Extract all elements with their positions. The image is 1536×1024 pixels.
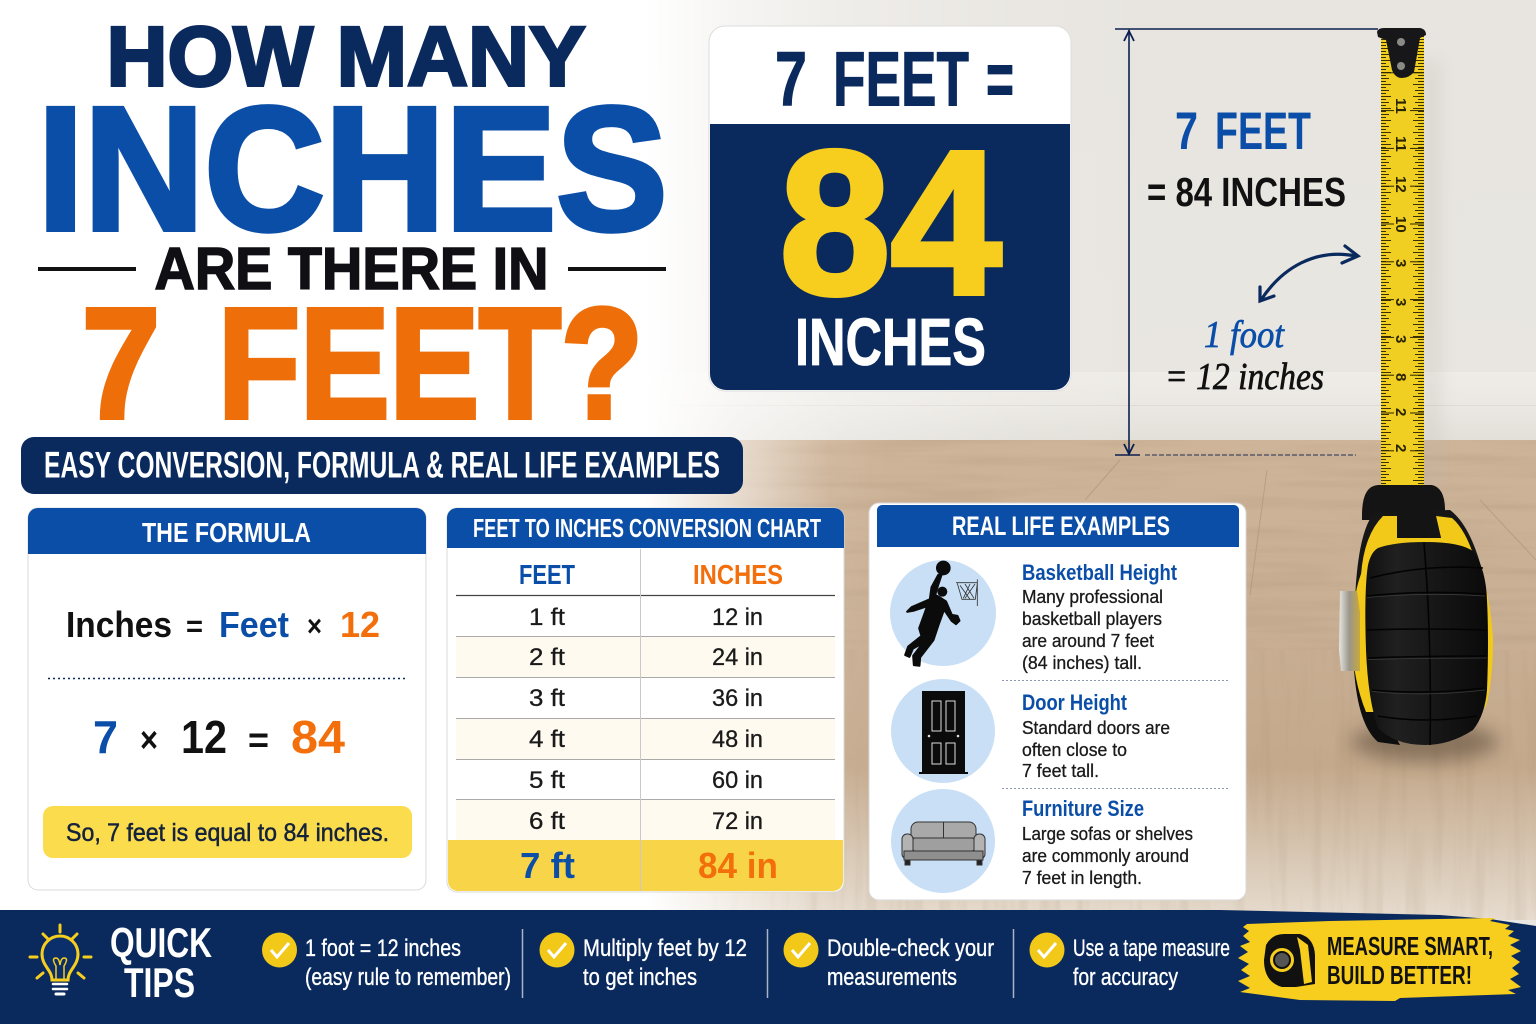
quick tips heading — [110, 919, 212, 1006]
chart header: FEET TO INCHES CONVERSION CHART — [473, 513, 821, 543]
chart rows: 4 ft — [529, 726, 565, 753]
chart rows: 48 in — [712, 726, 763, 753]
title line: are there in: ARE THERE IN — [154, 236, 548, 302]
handwritten note: 1 foot equals 12 inches: = 12 inches — [1165, 356, 1324, 398]
blade numbers: 10 — [1392, 216, 1409, 233]
icon: tape measure — [1264, 934, 1315, 987]
slogan text: BUILD BETTER! — [1327, 960, 1472, 990]
general formula: Inches — [66, 604, 172, 645]
examples header: REAL LIFE EXAMPLES — [952, 511, 1170, 541]
door text: 7 feet tall. — [1022, 761, 1099, 781]
tip 2 — [540, 932, 747, 991]
worked example — [93, 711, 345, 763]
furniture text: are commonly around — [1022, 846, 1189, 866]
example: door — [891, 679, 1170, 783]
blade numbers: 8 — [1392, 373, 1409, 381]
tip 3: Double-check your — [827, 935, 994, 962]
tip 2: Multiply feet by 12 — [583, 935, 747, 962]
worked example: 12 — [181, 711, 227, 763]
answer number: 84 — [780, 108, 1002, 338]
basketball text: are around 7 feet — [1022, 631, 1154, 651]
panel: quick tips bar — [0, 910, 1536, 1024]
door text: often close to — [1022, 740, 1127, 760]
blade numbers: 3 — [1392, 298, 1409, 306]
tip 4 — [1030, 932, 1230, 991]
general formula: × — [307, 610, 322, 643]
height dimension arrow — [1115, 29, 1378, 455]
icon: door — [919, 691, 968, 774]
answer card — [709, 26, 1071, 391]
chart rows: 5 ft — [529, 767, 565, 794]
door text: Door Height — [1022, 690, 1128, 715]
subtitle pill: EASY CONVERSION, FORMULA & REAL LIFE EXAMPLES — [44, 444, 720, 486]
general formula — [66, 604, 380, 645]
title line: how many: HOW MANY — [106, 10, 586, 104]
subtitle pill — [21, 437, 743, 494]
quick tips heading: TIPS — [124, 959, 195, 1006]
worked example: 7 — [93, 711, 118, 763]
tip 3 — [784, 932, 994, 991]
chart highlighted row: 7 ft — [520, 845, 575, 886]
chart column headings — [519, 559, 783, 590]
title block — [38, 10, 668, 452]
basketball text: basketball players — [1022, 609, 1162, 629]
basketball text: Many professional — [1022, 587, 1163, 607]
tip 4: for accuracy — [1073, 964, 1178, 991]
chart row shading — [456, 637, 835, 840]
tape measure blade — [1377, 28, 1438, 490]
blade numbers: 11 — [1392, 136, 1409, 152]
chart highlighted row background — [448, 840, 843, 891]
handwritten note: 1 foot equals 12 inches — [1165, 314, 1324, 398]
furniture text: 7 feet in length. — [1022, 868, 1142, 888]
chart rows: 3 ft — [529, 685, 565, 712]
chart column headings: FEET — [519, 559, 575, 590]
panel: conversion chart — [447, 508, 844, 892]
handwritten note: 1 foot equals 12 inches: 1 foot — [1204, 314, 1285, 356]
furniture text: Furniture Size — [1022, 796, 1144, 821]
general formula: Feet — [219, 604, 289, 645]
blade numbers: 12 — [1392, 176, 1409, 193]
wall label: 7 feet equals 84 inches: 7 — [1175, 102, 1198, 161]
basketball text: Basketball Height — [1022, 560, 1178, 585]
panel: real life examples — [869, 503, 1246, 900]
wall label: 7 feet equals 84 inches — [1147, 102, 1346, 215]
general formula: 12 — [340, 604, 380, 645]
formula conclusion — [43, 806, 412, 858]
answer unit: INCHES — [795, 305, 986, 380]
furniture text: Large sofas or shelves — [1022, 824, 1193, 844]
formula header: THE FORMULA — [142, 517, 311, 548]
formula conclusion: So, 7 feet is equal to 84 inches. — [66, 819, 389, 847]
chart rows: 2 ft — [529, 644, 565, 671]
blade numbers: 3 — [1392, 335, 1409, 343]
chart highlighted row: 84 in — [698, 845, 778, 886]
answer heading: 7 — [775, 36, 807, 122]
chart rows: 60 in — [712, 767, 763, 794]
icon: basketball player — [905, 561, 977, 666]
tape measure body — [1339, 485, 1499, 762]
chart rows: 36 in — [712, 685, 763, 712]
tip 3: measurements — [827, 964, 957, 991]
wall label: 7 feet equals 84 inches: FEET — [1215, 102, 1311, 161]
tip 1: 1 foot = 12 inches — [305, 935, 461, 962]
door text: Standard doors are — [1022, 718, 1170, 738]
blade numbers: 2 — [1392, 408, 1409, 416]
chart rows: 1 ft — [529, 604, 565, 631]
chart rows: 12 in — [712, 604, 763, 631]
quick tips heading: QUICK — [110, 919, 212, 966]
icon: basketball hoop — [956, 579, 977, 606]
title line: 7 feet: 7 — [82, 276, 160, 452]
curved double arrow — [1260, 246, 1358, 301]
answer heading: FEET — [833, 36, 969, 122]
title line: 7 feet — [82, 276, 643, 452]
basketball text — [1022, 560, 1178, 673]
panel: the formula — [28, 508, 426, 890]
slogan brush banner — [1238, 918, 1521, 1001]
door text — [1022, 690, 1170, 781]
chart column headings: INCHES — [693, 559, 783, 590]
worked example: = — [248, 719, 269, 760]
answer heading: = — [986, 36, 1014, 122]
furniture text — [1022, 796, 1193, 888]
tape body rubber casing — [1365, 542, 1488, 745]
blade numbers: 3 — [1392, 259, 1409, 267]
formula header — [28, 508, 426, 554]
tip 4: Use a tape measure — [1073, 935, 1230, 962]
title line: inches: INCHES — [38, 72, 668, 268]
chart rows — [529, 604, 763, 835]
blade numbers: 2 — [1392, 444, 1409, 452]
examples header — [877, 505, 1239, 547]
tip 1 — [262, 932, 511, 991]
chart header — [447, 508, 844, 548]
tape hook — [1339, 591, 1360, 671]
chart rows: 6 ft — [529, 808, 565, 835]
basketball text: (84 inches) tall. — [1022, 653, 1142, 673]
worked example: × — [140, 719, 158, 760]
general formula: = — [186, 610, 203, 643]
example: furniture — [891, 789, 1193, 893]
example: basketball — [890, 560, 1178, 673]
chart rows: 24 in — [712, 644, 763, 671]
chart highlighted row — [520, 845, 778, 886]
blade numbers — [1392, 98, 1409, 452]
chart rows: 72 in — [712, 808, 763, 835]
tip 2: to get inches — [583, 964, 697, 991]
tip 1: (easy rule to remember) — [305, 964, 511, 991]
blade end clip — [1377, 28, 1426, 78]
worked example: 84 — [291, 711, 345, 763]
blade numbers: 11 — [1392, 98, 1409, 114]
wall label: 7 feet equals 84 inches: = 84 INCHES — [1147, 169, 1346, 215]
icon: sofa — [902, 822, 985, 865]
title line: are there in — [38, 236, 666, 302]
slogan text — [1327, 931, 1493, 990]
title line: 7 feet: FEET? — [218, 276, 643, 452]
icon: light bulb — [30, 925, 91, 994]
